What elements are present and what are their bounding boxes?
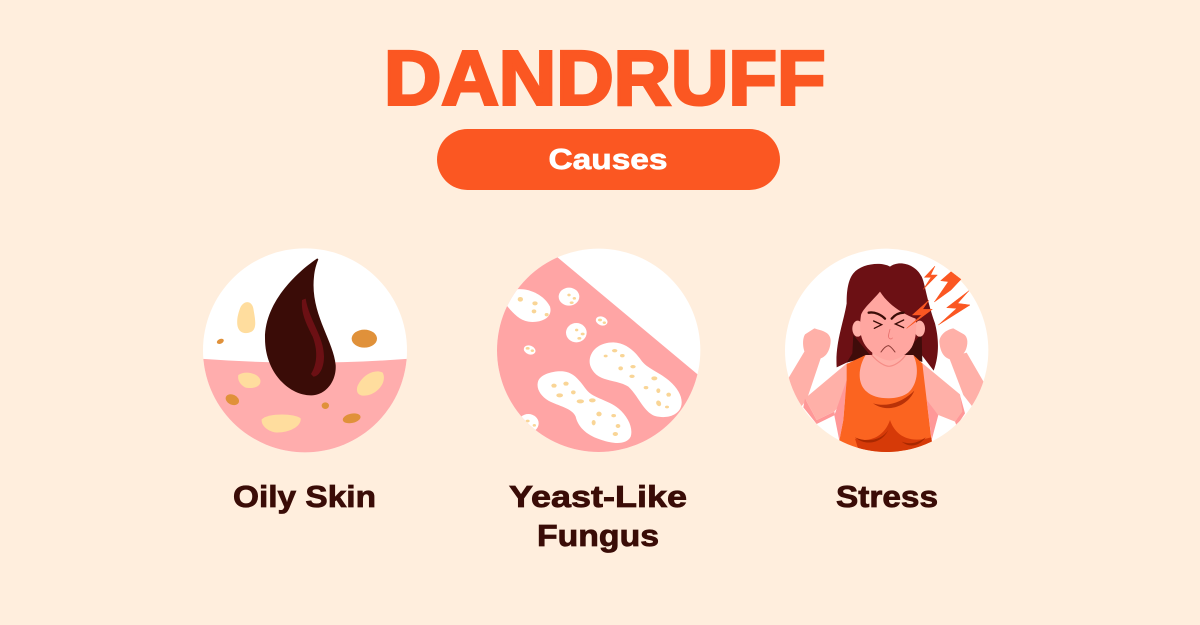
large flake left xyxy=(538,371,631,443)
icon: dark oil drop xyxy=(265,258,336,395)
lightning bolts xyxy=(907,266,970,328)
face xyxy=(852,292,925,366)
hair xyxy=(836,263,938,371)
oil blobs xyxy=(216,302,384,432)
label: Oily Skin: Oily Skin xyxy=(233,479,376,514)
angry brows and eyes xyxy=(869,312,904,352)
label: Yeast-Like Fungus: Fungus xyxy=(537,518,659,553)
large flake right xyxy=(590,342,682,417)
skin layer xyxy=(200,359,410,457)
label: Stress: Stress xyxy=(836,479,938,514)
label: Yeast-Like Fungus: Yeast-Like xyxy=(509,479,687,514)
hair shadow xyxy=(847,333,922,363)
panel: oily skin illustration xyxy=(200,248,410,457)
subtitle pill: Causes: Causes xyxy=(548,144,668,176)
small flakes xyxy=(518,288,609,433)
yeast dots xyxy=(518,294,671,436)
panel: stress illustration xyxy=(783,249,988,460)
panel: yeast-like fungus illustration xyxy=(492,247,700,460)
arms and fists xyxy=(783,328,988,441)
skin area xyxy=(497,258,698,452)
subtitle pill: Causes xyxy=(437,129,780,190)
right arm xyxy=(950,352,984,406)
top-left flake xyxy=(505,289,551,322)
left arm xyxy=(788,352,821,406)
label: Yeast-Like Fungus xyxy=(509,479,687,553)
orange top xyxy=(839,355,933,460)
title: DANDRUFF xyxy=(384,36,826,122)
chest and neck xyxy=(860,347,917,408)
